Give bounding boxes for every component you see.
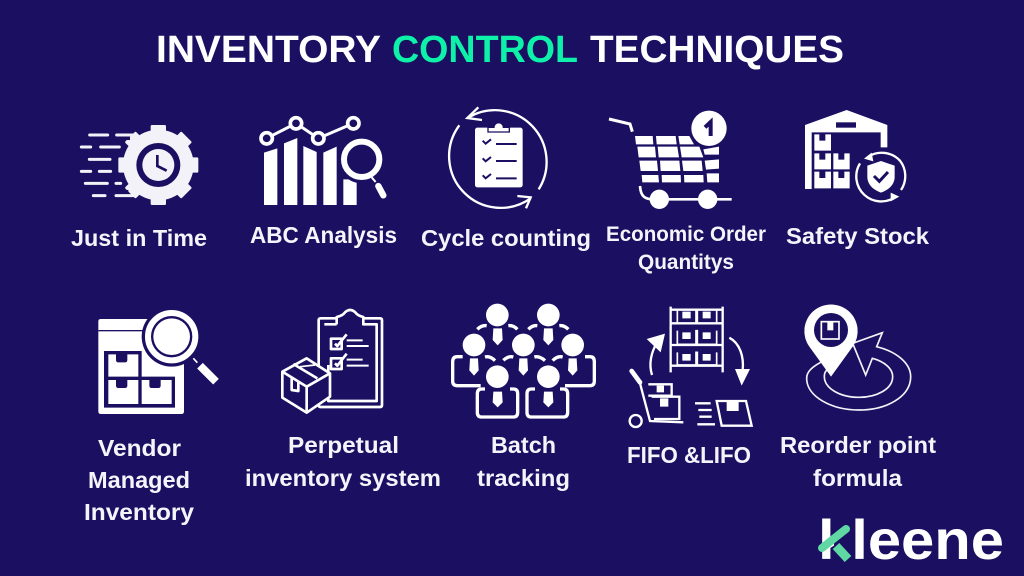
title — [156, 29, 844, 71]
title: CONTROL — [392, 29, 578, 71]
label: vendor managed inventory: Managed — [88, 467, 190, 493]
label: reorder point formula: Reorder point — [780, 432, 936, 458]
icon: batch tracking people — [453, 304, 594, 417]
label: reorder point formula — [780, 432, 936, 491]
label: vendor managed inventory — [84, 435, 194, 525]
label: just in time: Just in Time — [71, 225, 207, 251]
label: economic order quantitys: Quantitys — [638, 251, 734, 274]
icon: just in time gear — [81, 125, 198, 205]
title: TECHNIQUES — [590, 29, 844, 71]
logo: kleene: kleene — [818, 508, 1004, 571]
label: abc analysis: ABC Analysis — [250, 222, 397, 248]
icon: reorder point location pin — [804, 304, 911, 410]
icon: safety stock warehouse — [805, 110, 905, 201]
icon: vendor managed inventory — [98, 307, 216, 414]
title: INVENTORY — [156, 29, 381, 71]
icon: abc analysis chart — [261, 118, 386, 205]
icon: shopping cart — [609, 111, 732, 209]
label: batch tracking: tracking — [477, 465, 570, 491]
label: safety stock: Safety Stock — [786, 223, 929, 249]
label: fifo and lifo: FIFO &LIFO — [627, 442, 751, 468]
label: reorder point formula: formula — [813, 465, 902, 491]
label: vendor managed inventory: Vendor — [98, 435, 181, 461]
icon: cycle counting clipboard — [449, 107, 547, 208]
label: vendor managed inventory: Inventory — [84, 499, 194, 525]
label: perpetual inventory system: inventory system — [245, 465, 441, 491]
label: perpetual inventory system: Perpetual — [288, 432, 399, 458]
label: batch tracking — [477, 432, 570, 491]
label: cycle counting: Cycle counting — [421, 225, 591, 251]
label: economic order quantitys — [606, 223, 766, 274]
label: perpetual inventory system — [245, 432, 441, 491]
label: batch tracking: Batch — [491, 432, 556, 458]
icon: fifo and lifo rack with trolley — [630, 307, 752, 427]
label: economic order quantitys: Economic Order — [606, 223, 766, 246]
icon: perpetual inventory clipboard and box — [282, 310, 382, 413]
